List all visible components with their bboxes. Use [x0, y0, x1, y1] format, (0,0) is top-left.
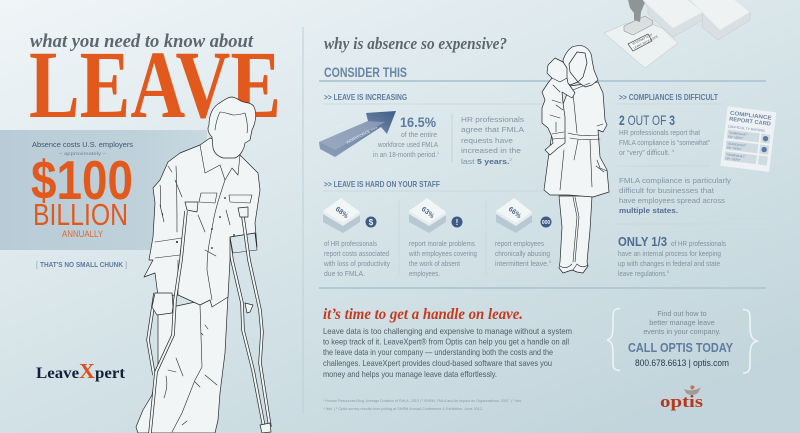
- stat: only 1/3: 5: [667, 269, 670, 274]
- stat: 66% abusing leave: [495, 198, 552, 268]
- callout: call Optis today: 800.678.6613 | optis.com: [635, 358, 729, 368]
- callout: call Optis today: better manage leave: [649, 318, 715, 327]
- callout: call Optis today: CALL OPTIS TODAY: [628, 340, 733, 355]
- callout: no small chunk: [: [36, 260, 38, 269]
- stat: 66% abusing leave: 000: [542, 220, 550, 226]
- icon: compliance report card: “SOMEWHAT”: [726, 152, 745, 159]
- logo: LeaveXpert: LeaveXpert: [36, 359, 126, 383]
- callout: call Optis today: Find out how to: [657, 309, 707, 318]
- vertical divider: [302, 27, 304, 413]
- icon: rising arrow: WORKFORCE >>>: [345, 124, 379, 145]
- stat: 16.5%: [373, 114, 440, 159]
- stat: 66% abusing leave: report employees: [495, 241, 544, 248]
- panel: absence cost stat: [31, 140, 133, 240]
- shirt collar, placket and pockets: [155, 145, 257, 300]
- title: what you need to know about: [30, 32, 254, 52]
- stat: 63% morale: the work of absent: [409, 261, 460, 268]
- text: multiple states: have employees spread across: [619, 196, 725, 205]
- stat: 2 out of 3: [619, 112, 711, 157]
- icon: rising arrow: [319, 111, 396, 157]
- stat: 16.5%: 1: [437, 150, 440, 155]
- heading: why is absence so expensive: why is absence so expensive?: [324, 34, 507, 53]
- callout: no small chunk: ]: [125, 260, 127, 269]
- title: LEAVE: [29, 31, 281, 138]
- text: HR professionals agree: last 5 years.: [461, 157, 505, 166]
- panel: get a handle on leave: the leave data in your company — understanding both the costs and the: [323, 348, 553, 357]
- section: compliance is difficult: [617, 92, 767, 278]
- panel: cost band: [0, 130, 207, 250]
- text: HR professionals agree: increased in the: [461, 146, 521, 155]
- section: compliance is difficult: >> COMPLIANCE IS DIFFICULT: [619, 92, 719, 102]
- stat: 66% abusing leave: 3: [549, 259, 552, 264]
- stat: 16.5%: workforce used FMLA: [377, 142, 438, 149]
- icon: compliance report card: “SOMEWHAT”: [727, 142, 747, 148]
- stat: only 1/3: [618, 234, 726, 278]
- trouser creases: [164, 305, 217, 432]
- icon: compliance report card: [720, 106, 776, 172]
- callout: call Optis today: events in your company.: [643, 327, 721, 336]
- icon: compliance report card: “SOMEWHAT”: [728, 131, 748, 137]
- section: leave is increasing: [319, 92, 545, 166]
- panel: get a handle on leave: it’s time to get a handle on leave.: [323, 306, 523, 323]
- stat: only 1/3: up with changes in federal and state: [618, 261, 720, 268]
- stat: 16.5%: 16.5%: [400, 114, 436, 130]
- panel: absence cost stat: Absence costs U.S. employers: [32, 140, 133, 149]
- stat: 68% productivity: [323, 198, 390, 278]
- panel: get a handle on leave: [323, 306, 572, 379]
- illustration: stamp and paper stacks: INTERMITTENT: [632, 33, 653, 46]
- crutch rear part: [228, 233, 253, 370]
- text: HR professionals agree: HR professionals: [461, 115, 524, 124]
- illustration: stamp and paper stacks: [604, 0, 750, 68]
- illustration: stamp and paper stacks: LEAVE REQUESTS: [633, 35, 659, 50]
- stat: 68% productivity: due to FMLA.: [324, 271, 365, 278]
- stat: only 1/3: ONLY 1/3: [618, 234, 667, 249]
- panel: get a handle on leave: to keep track of it. LeaveXpert® from Optis can help you get a handle on all: [323, 338, 569, 346]
- panel: absence cost stat: ANNUALLY: [62, 229, 104, 240]
- text: HR professionals agree: 2: [509, 157, 513, 162]
- logo: optis: optis: [660, 392, 703, 411]
- icon: compliance report card: OR “VERY”: [728, 135, 744, 140]
- stat: 16.5%: in an 18-month period.: [373, 152, 443, 159]
- icon: compliance report card: REPORT CARD: [729, 117, 771, 128]
- stat: 2 out of 3: 2 OUT OF 3: [619, 112, 675, 128]
- panel: absence cost stat: $100: [31, 149, 133, 211]
- stat: 68% productivity: 68%: [334, 206, 350, 221]
- panel: get a handle on leave: Leave data is too challenging and expensive to manage without a system: [323, 327, 572, 336]
- panel: get a handle on leave: money and helps you manage leave data effortlessly.: [323, 370, 497, 379]
- panel: get a handle on leave: challenges. LeaveXpert provides cloud-based software that saves you: [323, 359, 552, 368]
- stat: 66% abusing leave: 66%: [507, 206, 523, 221]
- callout: call Optis today: [607, 308, 757, 373]
- text: HR professionals agree: [461, 115, 525, 166]
- stat: only 1/3: have an internal process for keeping: [618, 251, 721, 258]
- stat: 68% productivity: of HR professionals: [324, 241, 377, 248]
- stat: 68% productivity: report costs associated: [324, 251, 389, 258]
- stat: 66% abusing leave: chronically abusing: [495, 251, 550, 258]
- stat: 2 out of 3: 4: [672, 148, 675, 153]
- text: multiple states: FMLA compliance is particularly: [619, 176, 731, 185]
- stat: only 1/3: of HR professionals: [671, 241, 726, 248]
- icon: compliance report card: DIFFICULTY RATING: [728, 125, 766, 133]
- icon: compliance report card: OR “VERY”: [725, 156, 741, 162]
- section: leave is hard on your staff: >> LEAVE IS HARD ON YOUR STAFF: [324, 179, 440, 189]
- stat: 2 out of 3: FMLA compliance is “somewhat”: [619, 140, 711, 147]
- stat: 63% morale: 63%: [420, 206, 436, 221]
- text: HR professionals agree: requests have: [461, 136, 513, 145]
- illustration: mother holding child: [542, 46, 609, 273]
- footnotes: ⁴ Ibid. | ⁵ Optis survey results from polling at SHRM Annual Conference & Exhibition, June 2012.: [323, 407, 483, 411]
- text: multiple states: [619, 176, 731, 215]
- logo: optis: [660, 385, 703, 411]
- stat: 63% morale: !: [456, 218, 458, 227]
- stat: 2 out of 3: or “very” difficult.: [619, 150, 671, 157]
- footnotes: [323, 399, 522, 411]
- text: multiple states: difficult for businesses that: [619, 186, 714, 195]
- footnotes: ¹ Human Resources Blog, Average Duration of FMLA, 2010 | ² SHRM, FMLA and Its Impact on Organizations, 2007. | ³ Ibid.: [323, 399, 522, 403]
- stat: 63% morale: employees.: [409, 271, 440, 278]
- panel: absence cost stat: – approximately –: [59, 151, 106, 157]
- illustration: man on crutches: [136, 97, 271, 433]
- stat: 63% morale: report morale problems: [409, 241, 475, 248]
- stat: 66% abusing leave: intermittent leave.: [495, 261, 550, 268]
- stat: 2 out of 3: HR professionals report that: [619, 130, 700, 137]
- stat: 63% morale: with employees covering: [408, 251, 477, 258]
- callout: no small chunk: THAT'S NO SMALL CHUNK: [40, 260, 124, 269]
- stat: 63% morale: [408, 198, 477, 278]
- stat: 68% productivity: with loss of productivity: [323, 261, 390, 268]
- left crutch: [148, 293, 155, 375]
- text: multiple states: multiple states.: [619, 206, 678, 215]
- heading: consider this: CONSIDER THIS: [324, 65, 407, 80]
- stat: 68% productivity: $: [369, 218, 374, 227]
- stat: 16.5%: of the entire: [401, 132, 437, 139]
- icon: compliance report card: OR “VERY”: [726, 145, 742, 151]
- stat: only 1/3: leave regulations.: [618, 271, 673, 278]
- panel: absence cost stat: BILLION: [33, 197, 128, 232]
- icon: compliance report card: COMPLIANCE: [729, 111, 772, 122]
- right crutch: [243, 217, 270, 427]
- section: leave is increasing: >> LEAVE IS INCREASING: [324, 92, 407, 102]
- icon: rising arrow: TIME >>>: [334, 118, 353, 130]
- text: HR professionals agree: agree that FMLA: [461, 125, 525, 134]
- section: leave is hard on your staff: [323, 179, 552, 278]
